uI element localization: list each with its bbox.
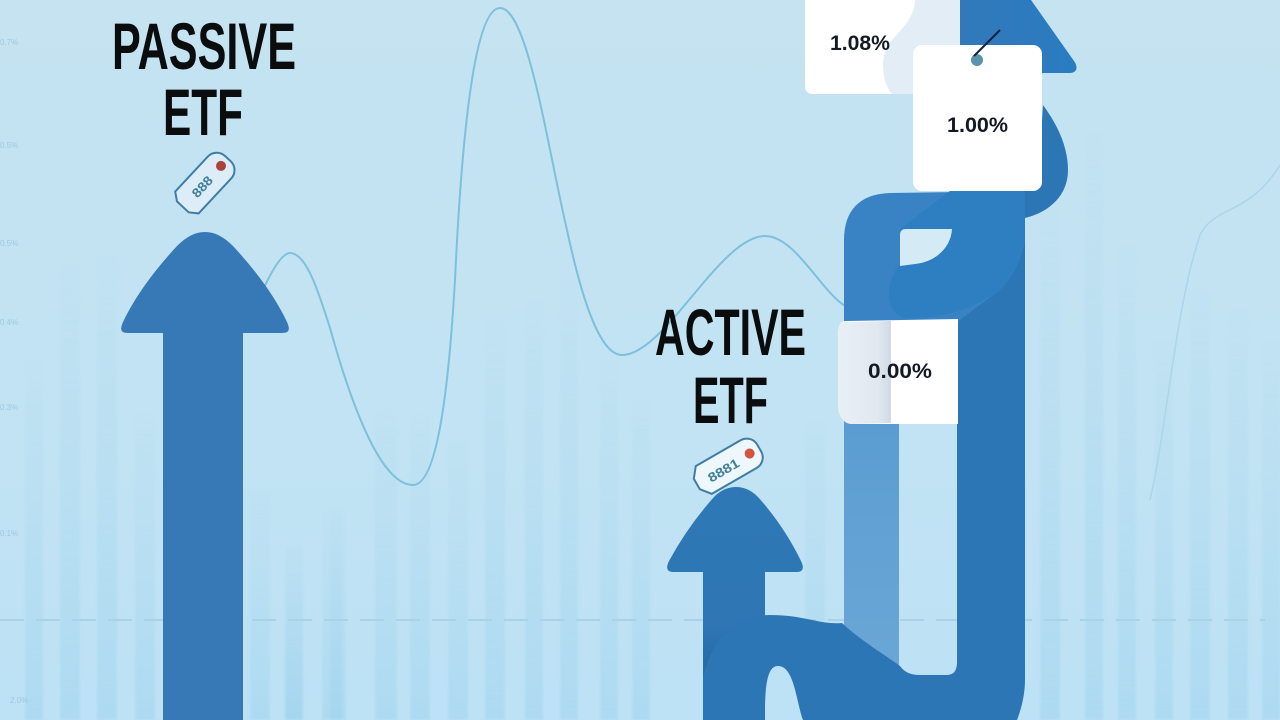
card: 1.08%: 1.08% <box>830 32 890 55</box>
card: 1.08% <box>805 0 960 94</box>
passive arrow <box>121 232 289 720</box>
faint right trend line <box>1150 165 1280 500</box>
pipe top and right column <box>703 105 1068 720</box>
active heading: ACTIVE <box>655 295 806 369</box>
axis labels <box>0 38 28 705</box>
axis labels: 2.0% <box>10 696 28 705</box>
active price tag: 8881 <box>705 455 742 485</box>
chart baseline <box>0 619 1265 621</box>
passive heading: ETF <box>163 75 243 149</box>
main curved pipe <box>703 0 1077 720</box>
upper arrow head <box>960 0 1077 73</box>
passive price tag <box>171 148 240 218</box>
pipe window <box>900 229 952 266</box>
passive price tag: 888 <box>189 173 216 201</box>
card: 1.00% <box>913 30 1042 191</box>
active arrow <box>667 487 803 720</box>
axis labels: 0.5% <box>0 239 18 248</box>
active heading <box>655 295 806 437</box>
active price tag <box>689 434 767 498</box>
pipe upper left section <box>844 191 1025 322</box>
axis labels: 0.5% <box>0 141 18 150</box>
light pipe column <box>844 300 899 680</box>
axis labels: 0.1% <box>0 529 18 538</box>
trend line <box>262 8 845 485</box>
passive heading <box>112 9 296 149</box>
card: 1.00%: 1.00% <box>947 114 1008 137</box>
card: 0.00% <box>838 319 958 424</box>
active heading: ETF <box>693 363 768 437</box>
axis labels: 0.7% <box>0 38 18 47</box>
axis labels: 0.3% <box>0 403 18 412</box>
card: 0.00%: 0.00% <box>868 360 932 383</box>
passive heading: PASSIVE <box>112 9 296 83</box>
pipe bend highlight <box>889 191 1025 318</box>
axis labels: 0.4% <box>0 318 18 327</box>
pin icon <box>971 30 1000 66</box>
